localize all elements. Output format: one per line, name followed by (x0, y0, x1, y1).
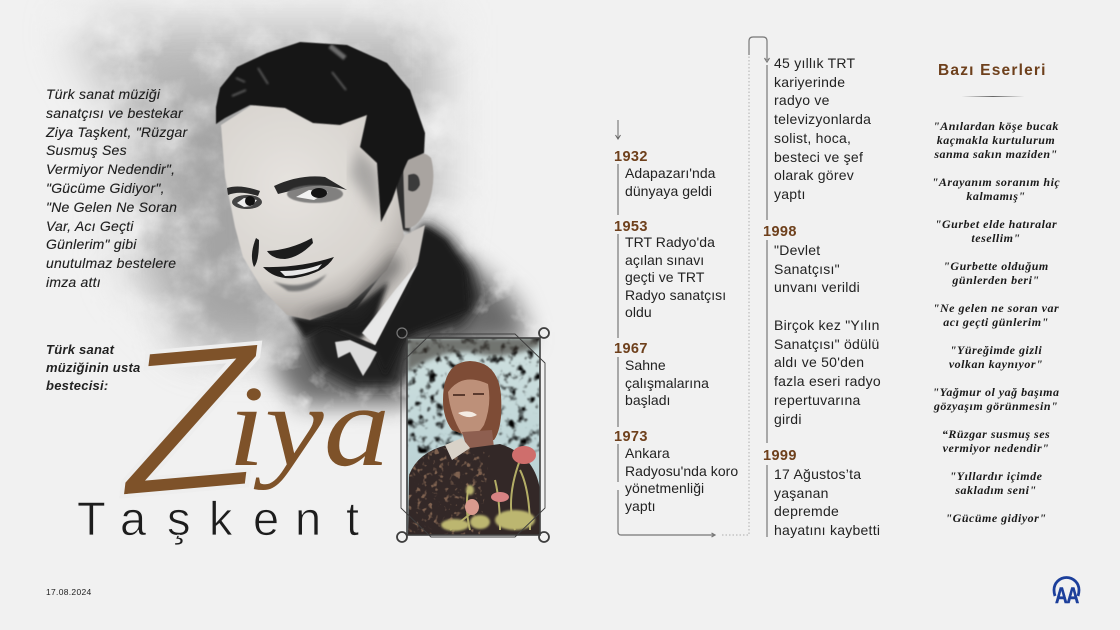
quote 6: "Yüreğimde gizli volkan kaynıyor" (949, 343, 1043, 371)
portrait: forehead shading (350, 120, 383, 222)
quote 7: "Yağmur ol yağ başıma gözyaşım görünmesin" (932, 385, 1060, 413)
timeline connectors (616, 37, 770, 537)
1953 year: 1953 (614, 219, 648, 235)
portrait: jaw shadow (296, 250, 402, 320)
1953 text: TRT Radyo'da açılan sınavı geçti ve TRT Radyo sanatçısı oldu (625, 234, 726, 320)
portrait: right eye (274, 176, 347, 203)
photo: face (448, 380, 489, 436)
photo: collar (445, 438, 470, 460)
quote 10: "Gücüme gidiyor" (946, 511, 1046, 525)
photo: sky (407, 338, 540, 535)
intro text: Türk sanat müziği sanatçısı ve bestekar Ziya Taşkent, "Rüzgar Susmuş Ses Vermiyor Nedendir", "Gücüme Gidiyor", "Ne Gelen Ne Soran Var, Acı Geçti Günlerim" gibi unutulmaz bestelere imza attı (46, 86, 187, 290)
portrait: shirt collar and tie (335, 263, 418, 376)
photo: flowers (465, 446, 536, 515)
portrait: left eye (227, 187, 262, 209)
1998 text: "Devlet Sanatçısı" unvanı verildi (774, 242, 860, 295)
photo: shirt pattern (408, 445, 490, 535)
logo: AA: AA (1055, 584, 1079, 608)
photo: shirt (408, 444, 540, 535)
name: Taşkent: Taşkent (77, 492, 359, 545)
quote 2: "Arayanım soranım hiç kalmamış" (932, 175, 1060, 203)
photo: eyes (453, 394, 484, 395)
awards text: Birçok kez "Yılın Sanatçısı" ödülü aldı ve 50'den fazla eseri radyo repertuvarına girdi (774, 317, 881, 427)
name: Ziya: iya (228, 363, 390, 491)
1967 text: Sahne çalışmalarına başladı (625, 357, 709, 408)
quote 3: "Gurbet elde hatıralar tesellim" (935, 217, 1057, 245)
portrait: sideburn shade (372, 150, 410, 232)
photo: plant stems (450, 460, 530, 530)
1973 text: Ankara Radyosu'nda koro yönetmenliği yaptı (625, 445, 738, 514)
small photo (397, 328, 549, 542)
photo: hair (443, 361, 501, 440)
portrait: hair (216, 42, 425, 222)
1998 year: 1998 (763, 224, 797, 240)
1973 year: 1973 (614, 429, 648, 445)
photo: mouth (458, 411, 477, 417)
portrait: suit (303, 222, 480, 388)
portrait: beard shadow (290, 282, 388, 340)
1932 year: 1932 (614, 149, 648, 165)
portrait: neck (340, 225, 425, 345)
quote 9: "Yıllardır içimde sakladım seni" (950, 469, 1042, 497)
subtitle text: Türk sanat müziğinin usta bestecisi: (46, 342, 140, 393)
1967 year: 1967 (614, 341, 648, 357)
1999 text: 17 Ağustos’ta yaşanan depremde hayatını kaybetti (774, 466, 880, 538)
career text: 45 yıllık TRT kariyerinde radyo ve televizyonlarda solist, hoca, besteci ve şef olarak görev yaptı (774, 55, 871, 202)
quote 8: “Rüzgar susmuş ses vermiyor nedendir" (942, 427, 1050, 455)
ink wash background (70, 25, 530, 405)
quote 5: "Ne gelen ne soran var acı geçti günlerim" (933, 301, 1059, 329)
portrait: cheek crease (252, 238, 259, 267)
timeline column 1 (614, 149, 738, 514)
portrait: mouth (263, 257, 334, 291)
portrait: ear (403, 153, 433, 228)
name: Ziya (105, 299, 390, 541)
name: Ziya: Z (105, 299, 276, 541)
timeline column 2 (763, 55, 881, 538)
quote 1: "Anılardan köşe bucak kaçmakla kurtulurum sanma sakın maziden" (933, 119, 1059, 161)
photo: neck (462, 430, 494, 452)
logo: AA (1052, 576, 1080, 608)
heading rule (962, 96, 1024, 97)
photo: frame (397, 328, 549, 542)
1932 text: Adapazarı'nda dünyaya geldi (625, 165, 716, 199)
portrait: nose (267, 238, 313, 259)
photo: tree foliage (407, 338, 540, 453)
1999 year: 1999 (763, 448, 797, 464)
portrait: face (221, 100, 404, 320)
portrait: hair highlights (232, 46, 346, 96)
portrait illustration with ink wash (62, 0, 770, 545)
photo: foliage (441, 485, 535, 531)
works heading: Bazı Eserleri (938, 62, 1047, 79)
quote 4: "Gurbette olduğum günlerden beri" (943, 259, 1049, 287)
portrait: suit core (372, 226, 468, 375)
date: 17.08.2024 (46, 587, 92, 597)
